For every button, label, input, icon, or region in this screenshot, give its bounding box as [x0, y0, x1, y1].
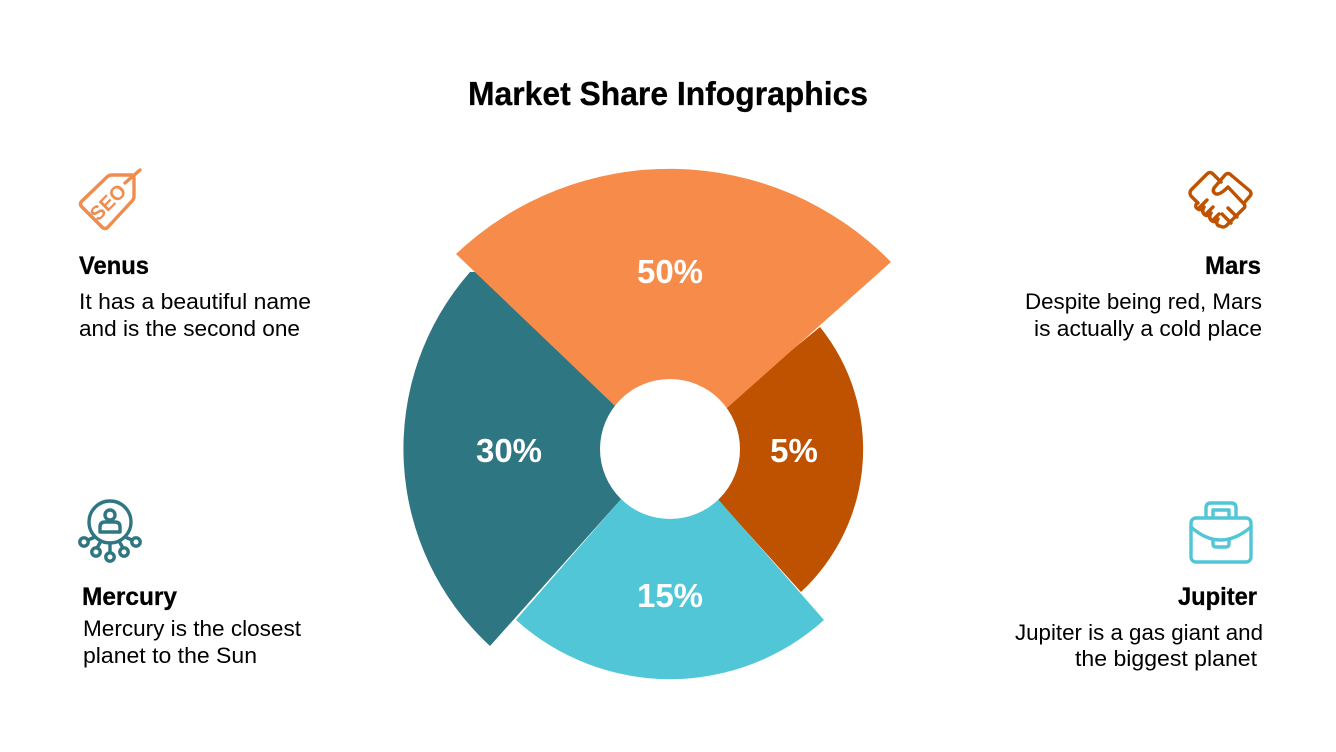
heading: Mercury	[82, 583, 177, 611]
slice: 30% dark teal	[403, 272, 640, 646]
description: It has a beautiful name	[79, 289, 311, 314]
heading: Venus	[79, 252, 149, 280]
description: is actually a cold place	[1034, 316, 1262, 341]
icon: SEO price tag	[80, 170, 140, 228]
panel: Mars	[1025, 172, 1262, 341]
slice: 50% orange	[456, 169, 891, 440]
description	[83, 616, 301, 668]
slice: 5% burnt orange	[700, 327, 863, 592]
label 15%: 15%	[637, 577, 703, 614]
centre hole	[600, 379, 740, 519]
description	[79, 289, 311, 341]
description	[1015, 620, 1263, 671]
panel: Venus	[79, 170, 311, 341]
label 5%: 5%	[770, 432, 818, 469]
description: Despite being red, Mars	[1025, 289, 1262, 314]
label 50%: 50%	[637, 253, 703, 290]
heading: Jupiter	[1178, 583, 1257, 611]
panel: Mercury	[80, 501, 301, 668]
panel: Jupiter	[1015, 503, 1263, 671]
label 30%: 30%	[476, 432, 542, 469]
description: Jupiter is a gas giant and	[1015, 620, 1263, 645]
title: Market Share Infographics	[468, 75, 868, 112]
description: and is the second one	[79, 316, 300, 341]
description: the biggest planet	[1075, 646, 1257, 671]
description: planet to the Sun	[83, 643, 257, 668]
description	[1025, 289, 1262, 341]
icon: connected user	[80, 501, 140, 561]
slice: 15% cyan	[516, 470, 824, 679]
icon: SEO price tag: SEO	[86, 180, 131, 226]
description: Mercury is the closest	[83, 616, 301, 641]
pie chart	[403, 169, 891, 679]
icon: briefcase	[1191, 503, 1251, 562]
heading: Mars	[1205, 252, 1261, 280]
icon: handshake	[1190, 172, 1251, 227]
